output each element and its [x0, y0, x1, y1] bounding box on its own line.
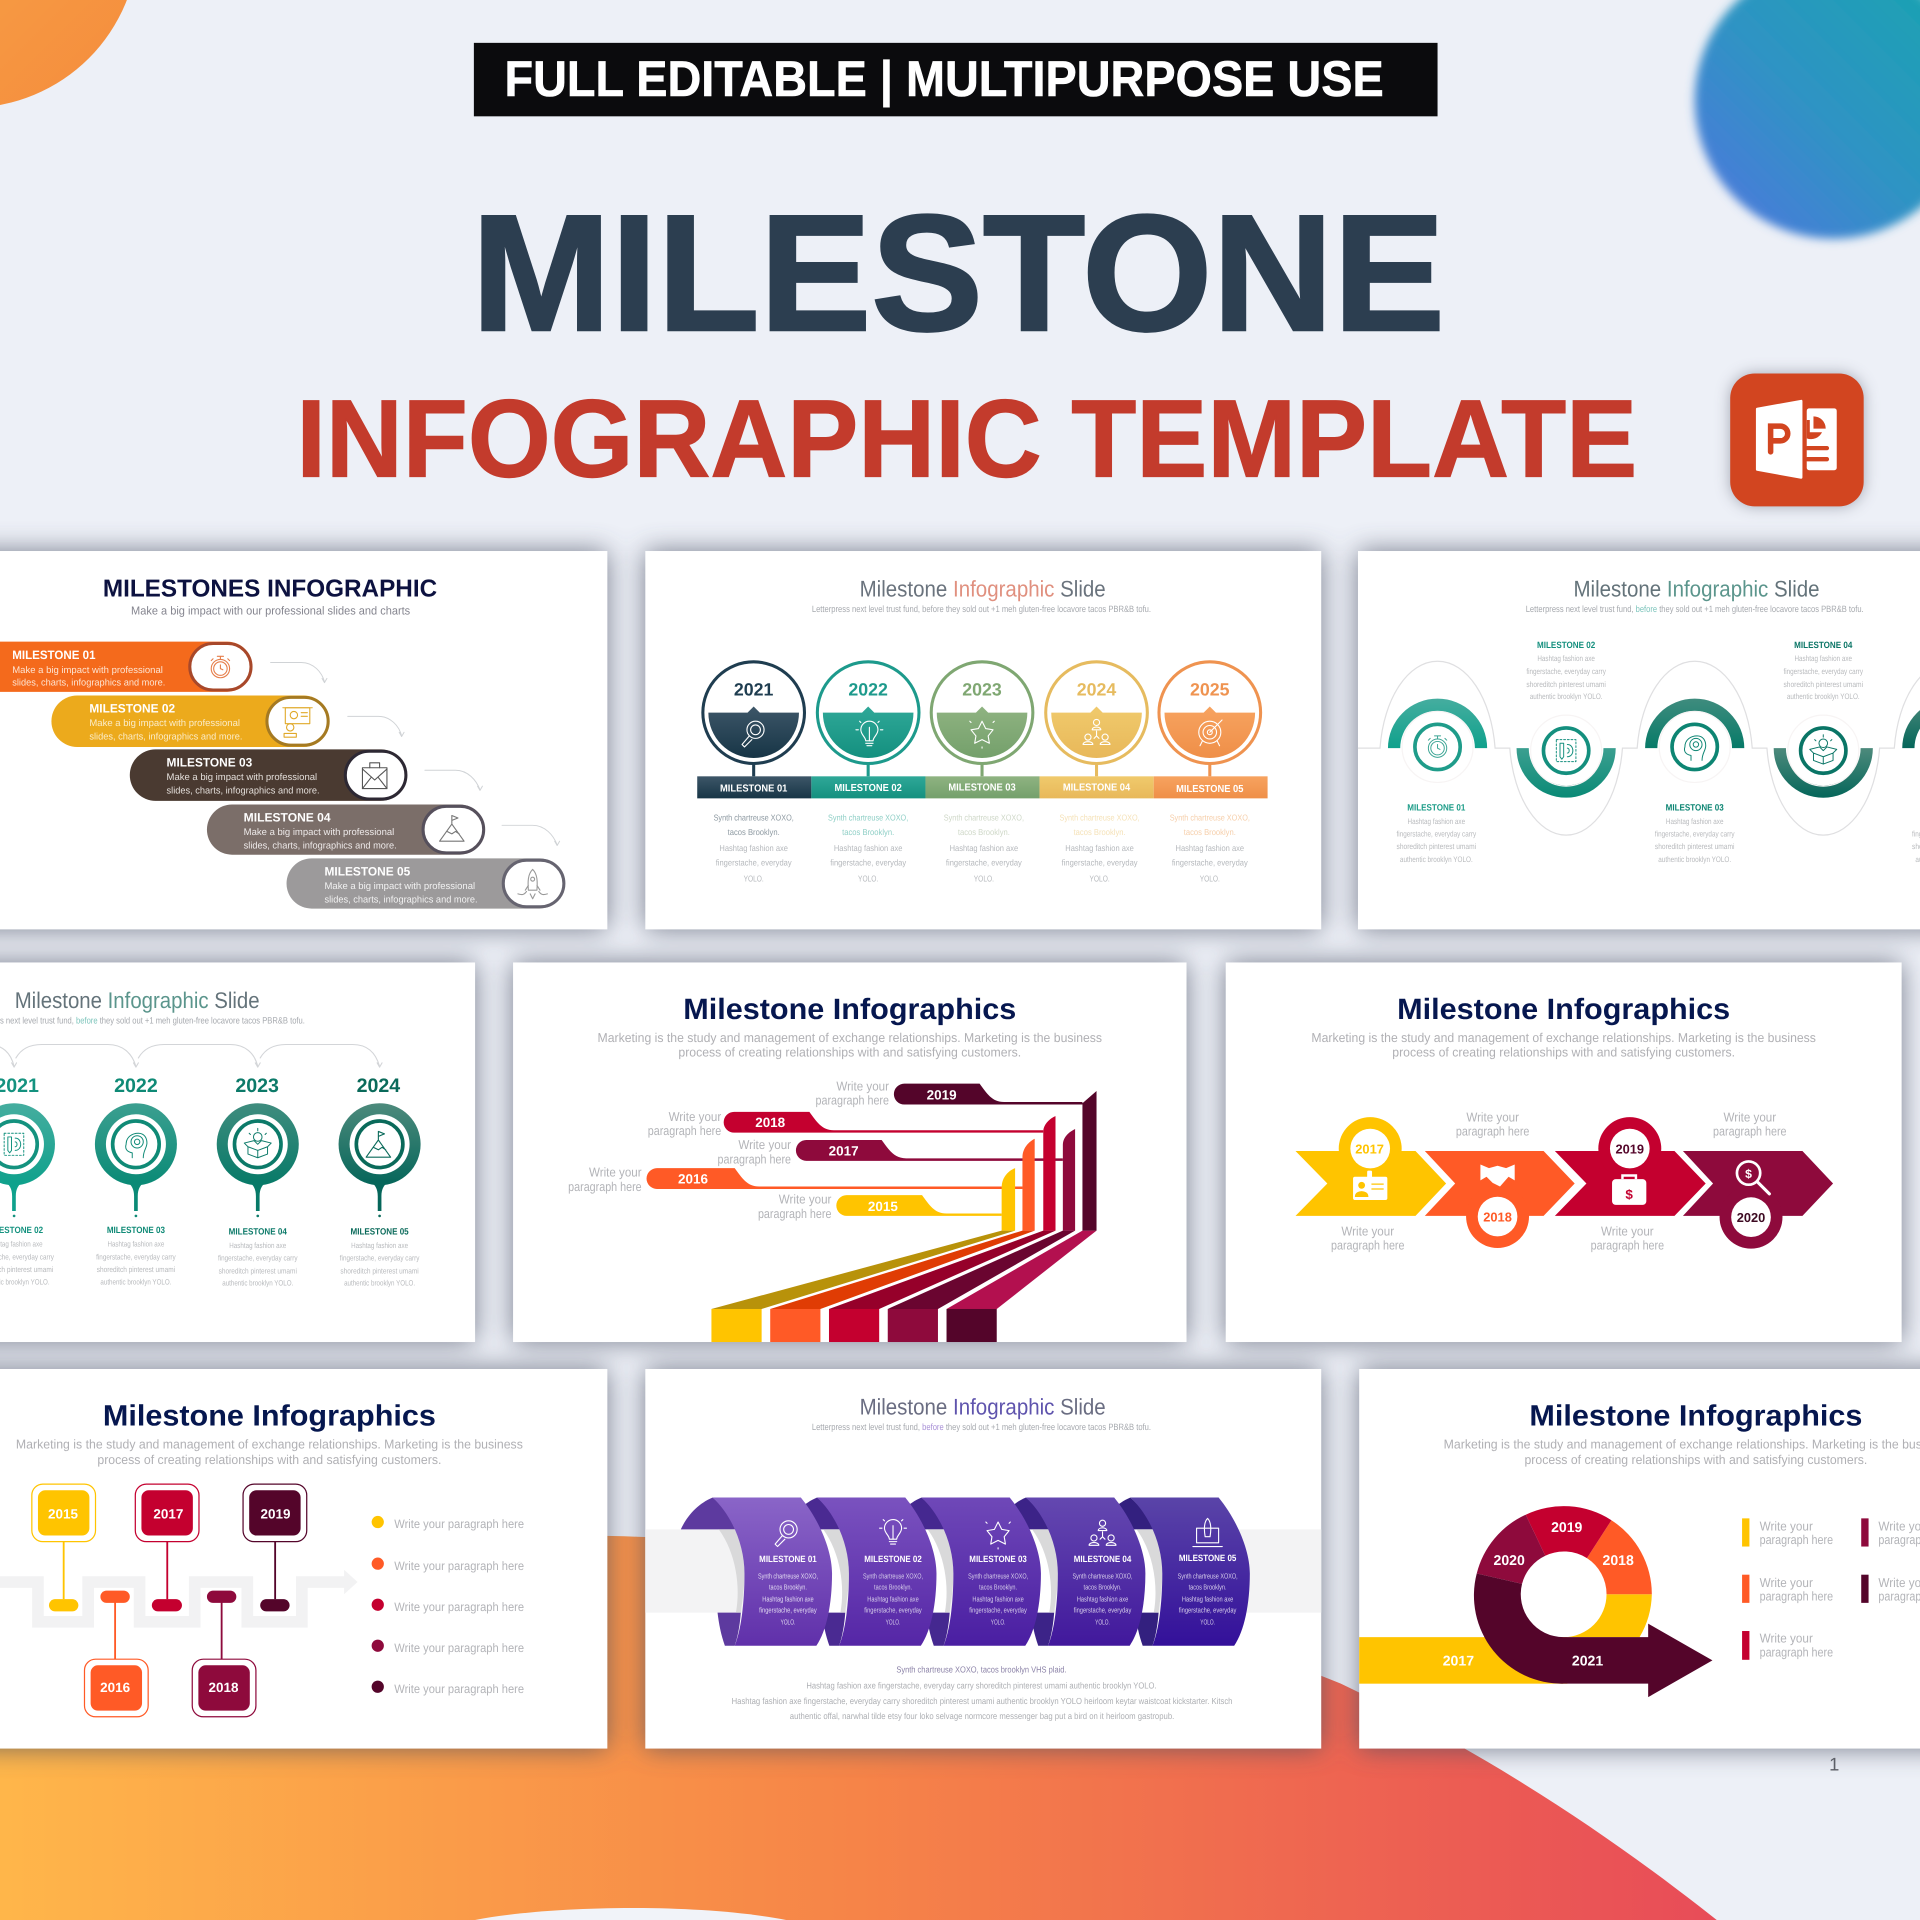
column text 3 [944, 813, 1024, 884]
label 02 [1526, 639, 1607, 702]
label 04: authentic brooklyn YOLO. [1787, 693, 1860, 702]
label 03: shoreditch pinterest umami [1655, 843, 1734, 852]
blue corner blob [1695, 0, 1920, 239]
box 2017: 2017 [153, 1507, 183, 1522]
pin label 03 [96, 1224, 177, 1287]
label 04: fingerstache, everyday carry [1783, 668, 1864, 677]
panel: slide A stepped milestones [0, 551, 607, 929]
label 01: authentic brooklyn YOLO. [1400, 856, 1473, 864]
chevron captions: Write your [1723, 1111, 1777, 1125]
title: Milestone Infographic Slide [860, 1393, 1106, 1419]
column text 4 [1059, 813, 1140, 884]
2024 circle: 2024 [1077, 681, 1116, 700]
column text 4: Hashtag fashion axe [1065, 844, 1134, 853]
subtitle: Marketing is the study and management of exchange relationships. Marketing is the business [1311, 1031, 1816, 1046]
tab 2017: 2017 [829, 1144, 859, 1159]
label 01: MILESTONE 01 [1407, 802, 1465, 813]
box 2016: 2016 [100, 1681, 130, 1696]
milestone 01 pill: Make a big impact with professional [12, 664, 163, 675]
pin label 04 [218, 1226, 298, 1288]
tab captions: Write your [669, 1110, 722, 1125]
label 04: MILESTONE 04 [1794, 639, 1853, 650]
bottom light curve [475, 1908, 786, 1920]
ribbon 01: Hashtag fashion axe [762, 1596, 814, 1604]
pin label 03: MILESTONE 03 [107, 1224, 165, 1236]
milestone 04 pill: slides, charts, infographics and more. [244, 840, 397, 851]
ribbon 05: tacos Brooklyn. [1189, 1583, 1227, 1592]
milestone 01 pill [0, 642, 252, 692]
title: Milestone Infographics [103, 1400, 436, 1433]
label 01: fingerstache, everyday carry [1397, 830, 1477, 839]
top banner: FULL EDITABLE | MULTIPURPOSE USE [504, 51, 1384, 108]
tab 2016: 2016 [678, 1172, 708, 1187]
title: Milestone Infographics [1397, 993, 1730, 1026]
ribbon 03: tacos Brooklyn. [979, 1583, 1017, 1592]
subtitle [1444, 1438, 1920, 1468]
label 04: Hashtag fashion axe [1794, 655, 1852, 664]
label 04: shoreditch pinterest umami [1783, 681, 1863, 689]
tab captions: paragraph here [718, 1152, 791, 1167]
milestone bar: MILESTONE 03 [948, 781, 1016, 793]
title: Milestone Infographics [1529, 1400, 1862, 1433]
ribbon 05: Hashtag fashion axe [1182, 1596, 1234, 1604]
chevron captions: paragraph here [1331, 1239, 1405, 1253]
main title: MILESTONE [471, 181, 1445, 366]
column text 2: fingerstache, everyday [830, 858, 907, 868]
box 2019: 2019 [261, 1507, 291, 1522]
icon: PowerPoint [1730, 373, 1864, 506]
ribbon 04 [994, 1498, 1145, 1646]
chevron 2017: 2017 [1355, 1142, 1384, 1157]
legend: paragraph here [1760, 1646, 1833, 1660]
column text 1: fingerstache, everyday [716, 858, 792, 868]
milestone 03 pill: slides, charts, infographics and more. [167, 785, 320, 796]
milestone 03 node [1645, 699, 1744, 782]
tab captions: paragraph here [758, 1207, 832, 1221]
tab 2019 [894, 1084, 1097, 1231]
donut arrow chart: 2021 [1572, 1654, 1604, 1669]
milestone 05 pill: Make a big impact with professional [324, 880, 475, 891]
chevron 2019: $ [1625, 1188, 1633, 1202]
chevron captions: paragraph here [1456, 1125, 1530, 1139]
column text 2 [828, 813, 908, 884]
title: Milestone Infographics [683, 993, 1016, 1026]
column text 1: Hashtag fashion axe [719, 844, 788, 853]
ribbon 03 [890, 1498, 1041, 1646]
box 2018: 2018 [208, 1681, 238, 1696]
legend: Write your [1760, 1520, 1813, 1534]
pin 2022 [95, 1076, 177, 1217]
chevron captions [1331, 1111, 1787, 1253]
panel: slide C wave milestones [1358, 551, 1920, 929]
legend: Write your paragraph here [394, 1518, 525, 1532]
footer text: Hashtag fashion axe fingerstache, everyday carry shoreditch pinterest umami authentic brooklyn YOLO. [806, 1680, 1157, 1691]
milestone 04 pill: MILESTONE 04 [244, 812, 331, 825]
label 03: authentic brooklyn YOLO. [1658, 856, 1731, 864]
donut arrow chart: 2019 [1551, 1521, 1582, 1536]
2024 circle [1046, 662, 1147, 776]
label 01: shoreditch pinterest umami [1397, 843, 1476, 852]
ribbon 04: YOLO. [1095, 1618, 1110, 1627]
column text 2: YOLO. [858, 876, 878, 884]
chevron captions: Write your [1466, 1111, 1520, 1125]
title: Milestone Infographic Slide [860, 576, 1106, 601]
label 05 partial [1912, 830, 1920, 864]
subtitle: process of creating relationships with and satisfying customers. [678, 1046, 1021, 1060]
tab captions: Write your [779, 1193, 832, 1207]
pin label 03: Hashtag fashion axe [107, 1240, 165, 1249]
tab captions: Write your [836, 1079, 890, 1094]
chevron 2019 [1555, 1117, 1706, 1216]
milestone 01 pill: MILESTONE 01 [12, 649, 96, 662]
column text 4: Synth chartreuse XOXO, [1059, 813, 1140, 823]
label 01 [1397, 802, 1477, 864]
column text 3: tacos Brooklyn. [958, 828, 1010, 838]
chevron 2018 [1425, 1151, 1575, 1248]
pin 2021 [0, 1076, 55, 1217]
panel: slide B year circles [645, 551, 1321, 929]
subtitle: Make a big impact with our professional slides and charts [131, 605, 410, 618]
milestone bar [697, 776, 1268, 798]
milestone 02 pill [51, 696, 329, 747]
ribbon 01: Synth chartreuse XOXO, [758, 1572, 818, 1581]
footer text [732, 1664, 1232, 1722]
chevron 2017 [1296, 1117, 1446, 1216]
column text 4: fingerstache, everyday [1062, 858, 1138, 868]
chevron 2019: 2019 [1615, 1142, 1644, 1157]
tab captions: paragraph here [816, 1093, 889, 1108]
tab captions: Write your [589, 1166, 642, 1180]
donut arrow chart: 2017 [1443, 1654, 1474, 1669]
pin label 03: authentic brooklyn YOLO. [100, 1278, 172, 1287]
column text 2: Hashtag fashion axe [834, 844, 903, 853]
pin label 03: shoreditch pinterest umami [97, 1266, 175, 1275]
column text 5 [1170, 813, 1250, 884]
road bands [711, 1231, 1097, 1342]
panel: slide D pin timeline [0, 962, 475, 1342]
orange corner blob [0, 0, 138, 108]
tab captions [568, 1079, 890, 1221]
column text 5: Synth chartreuse XOXO, [1170, 813, 1250, 823]
subtitle: process of creating relationships with and satisfying customers. [1524, 1453, 1867, 1468]
box 2015 [32, 1484, 96, 1611]
pin label 04: Hashtag fashion axe [229, 1242, 287, 1250]
label 02: MILESTONE 02 [1537, 639, 1595, 650]
legend: Write your paragraph here [394, 1683, 525, 1697]
milestone 05 pill [287, 858, 564, 909]
column text 2: tacos Brooklyn. [842, 828, 894, 838]
ribbon 04: Synth chartreuse XOXO, [1073, 1572, 1133, 1581]
tab 2015 [836, 1168, 1015, 1231]
ribbon 01: MILESTONE 01 [759, 1553, 817, 1564]
milestone 03 pill [130, 749, 407, 801]
label 02: fingerstache, everyday carry [1526, 668, 1607, 677]
2023 circle: 2023 [962, 681, 1002, 700]
2023 circle [931, 662, 1033, 776]
tab captions: Write your [738, 1138, 792, 1153]
column text 1 [714, 813, 794, 884]
milestone 02 pill: slides, charts, infographics and more. [89, 731, 242, 742]
donut arrow chart [1359, 1506, 1712, 1697]
chevron 2020: 2020 [1737, 1211, 1766, 1226]
subtitle: Letterpress next level trust fund, before they sold out +1 meh gluten-free locavore tacos PBR&B tofu. [812, 1422, 1151, 1433]
column text 1: YOLO. [744, 876, 764, 884]
legend: Write your [1760, 1632, 1813, 1646]
ribbon 01 [681, 1498, 832, 1646]
pin 2024: 2024 [357, 1076, 400, 1097]
pin label 05: MILESTONE 05 [351, 1226, 409, 1237]
ribbon 04: MILESTONE 04 [1074, 1553, 1132, 1564]
label 03: MILESTONE 03 [1666, 802, 1724, 813]
pin 2024 [339, 1076, 421, 1217]
legend: paragraph here [1760, 1589, 1833, 1604]
pin label 05: authentic brooklyn YOLO. [344, 1280, 415, 1288]
milestone 04 pill: Make a big impact with professional [244, 827, 395, 838]
2025 circle [1159, 662, 1261, 776]
tab 2016 [647, 1139, 1035, 1231]
pin 2023: 2023 [235, 1076, 279, 1097]
milestone 03 pill: MILESTONE 03 [167, 757, 253, 770]
tab 2018 [724, 1112, 1056, 1231]
ribbon 02: fingerstache, everyday [864, 1607, 922, 1615]
panel: slide I donut arrow [1359, 1369, 1920, 1749]
footer text: Synth chartreuse XOXO, tacos brooklyn VHS plaid. [896, 1664, 1067, 1675]
2022 circle: 2022 [848, 681, 888, 700]
ribbon 02 [785, 1498, 936, 1646]
ribbon 03: MILESTONE 03 [969, 1553, 1027, 1564]
title: MILESTONES INFOGRAPHIC [103, 576, 437, 602]
chevron captions: paragraph here [1591, 1239, 1664, 1253]
box 2015: 2015 [48, 1507, 78, 1522]
page number: 1 [1829, 1755, 1839, 1776]
ribbon 02: MILESTONE 02 [864, 1553, 922, 1564]
donut arrow chart: 2020 [1494, 1554, 1525, 1569]
column text 3: Synth chartreuse XOXO, [944, 813, 1024, 823]
box 2016 [84, 1591, 148, 1717]
tab 2015: 2015 [868, 1200, 898, 1215]
chevron captions: Write your [1601, 1224, 1654, 1239]
label 02: shoreditch pinterest umami [1526, 681, 1606, 689]
arrows [271, 662, 560, 846]
pin label 02 [0, 1224, 55, 1287]
milestone 02 pill: MILESTONE 02 [89, 703, 176, 716]
title: Milestone Infographic Slide [15, 987, 260, 1013]
grey band [645, 1529, 1321, 1613]
column text 5: fingerstache, everyday [1172, 858, 1248, 868]
subtitle [1311, 1031, 1816, 1060]
milestone bar: MILESTONE 04 [1063, 781, 1131, 793]
connector arrows [0, 1044, 382, 1067]
legend: Write your paragraph here [394, 1601, 525, 1614]
box 2017 [135, 1484, 199, 1611]
ribbon 04: tacos Brooklyn. [1084, 1583, 1122, 1592]
2021 circle: 2021 [734, 681, 773, 700]
subtitle: Letterpress next level trust fund, before they sold out +1 meh gluten-free locavore tacos PBR&B tofu. [1526, 604, 1864, 615]
pin 2023 [217, 1076, 299, 1217]
2021 circle [703, 662, 804, 776]
milestone bar: MILESTONE 02 [834, 781, 902, 793]
column text 2: Synth chartreuse XOXO, [828, 813, 908, 823]
ribbon 05: Synth chartreuse XOXO, [1178, 1572, 1238, 1581]
column text 3: Hashtag fashion axe [950, 844, 1018, 853]
pin label 05: fingerstache, everyday carry [340, 1254, 420, 1263]
ribbon 02: Synth chartreuse XOXO, [863, 1572, 923, 1581]
label 02: authentic brooklyn YOLO. [1530, 693, 1603, 702]
milestone 01 node [1388, 699, 1487, 782]
panel: slide G zigzag timeline [0, 1369, 607, 1749]
ribbon 04: Hashtag fashion axe [1077, 1596, 1129, 1604]
ribbon 03: Synth chartreuse XOXO, [968, 1572, 1028, 1581]
label 03: Hashtag fashion axe [1666, 818, 1724, 827]
legend [1742, 1518, 1920, 1660]
label 01: Hashtag fashion axe [1408, 818, 1465, 827]
column text 4: YOLO. [1089, 876, 1110, 884]
milestone 05 pill: slides, charts, infographics and more. [324, 894, 478, 905]
ribbon 01: fingerstache, everyday [759, 1607, 817, 1615]
ribbon 05: MILESTONE 05 [1179, 1553, 1236, 1564]
column text 5: tacos Brooklyn. [1184, 828, 1236, 838]
subtitle: process of creating relationships with and satisfying customers. [97, 1453, 441, 1468]
legend [372, 1516, 525, 1697]
label 03 [1655, 802, 1735, 864]
milestone 05 pill: MILESTONE 05 [324, 866, 411, 879]
column text 3: YOLO. [974, 876, 994, 884]
subtitle [16, 1438, 523, 1468]
ribbon 01: YOLO. [781, 1618, 796, 1627]
pin 2022: 2022 [114, 1076, 158, 1097]
partial node 05 [1902, 699, 1920, 748]
tab captions: paragraph here [648, 1124, 721, 1139]
slide shadows [0, 551, 1920, 1749]
tab captions: paragraph here [568, 1180, 642, 1194]
milestone bar: MILESTONE 01 [720, 782, 788, 794]
panel: slide F chevrons [1226, 962, 1902, 1342]
title: Milestone Infographic Slide [1573, 576, 1820, 601]
milestone 01 pill: slides, charts, infographics and more. [12, 677, 165, 688]
ribbon 02: YOLO. [886, 1618, 901, 1627]
pin label 04: authentic brooklyn YOLO. [222, 1280, 294, 1288]
pin label 04: fingerstache, everyday carry [218, 1254, 298, 1263]
legend: Write your paragraph here [394, 1642, 525, 1656]
chevron 2020 [1683, 1151, 1833, 1249]
milestone 02 node [1517, 715, 1616, 798]
ribbon 05 [1099, 1498, 1250, 1646]
bottom gradient wave [0, 1536, 1717, 1920]
pin label 04: shoreditch pinterest umami [219, 1267, 297, 1276]
column text 5: YOLO. [1200, 876, 1220, 884]
ribbon 02: tacos Brooklyn. [874, 1583, 912, 1592]
tab 2019: 2019 [927, 1089, 957, 1103]
pin label 05: shoreditch pinterest umami [340, 1267, 419, 1276]
chevron captions: Write your [1341, 1224, 1395, 1239]
box 2018 [192, 1591, 256, 1717]
ribbon 03: Hashtag fashion axe [972, 1596, 1024, 1604]
pin label 03: fingerstache, everyday carry [96, 1253, 177, 1262]
legend: Write your [1760, 1576, 1813, 1591]
label 03: fingerstache, everyday carry [1655, 830, 1735, 839]
chevron 2018: 2018 [1483, 1210, 1512, 1225]
subtitle: Marketing is the study and management of exchange relationships. Marketing is the business [598, 1031, 1102, 1046]
subtitle: Letterpress next level trust fund, before they sold out +1 meh gluten-free locavore tacos PBR&B tofu. [812, 604, 1151, 615]
chevron 2020: $ [1745, 1168, 1753, 1182]
pin label 04: MILESTONE 04 [229, 1226, 288, 1237]
milestone 04 node [1774, 715, 1873, 798]
ribbon 04: fingerstache, everyday [1074, 1607, 1131, 1615]
column text 5: Hashtag fashion axe [1176, 844, 1244, 853]
subtitle: INFOGRAPHIC TEMPLATE [296, 378, 1637, 501]
ribbon 03: fingerstache, everyday [969, 1607, 1027, 1615]
chevron captions: paragraph here [1713, 1125, 1787, 1139]
footer text: authentic offal, narwhal tilde etsy four loko selvage normcore messenger bag put a bird on it heirloom gastropub. [790, 1711, 1174, 1722]
ribbon 05: fingerstache, everyday [1179, 1607, 1236, 1615]
milestone 02 pill: Make a big impact with professional [89, 718, 240, 729]
legend: paragraph here [1760, 1533, 1833, 1548]
tab 2018: 2018 [755, 1116, 785, 1131]
2022 circle [817, 662, 919, 776]
panel: slide E perspective road [513, 962, 1187, 1342]
milestone 03 pill: Make a big impact with professional [167, 771, 317, 782]
tab 2017 [796, 1129, 1075, 1231]
legend: Write your paragraph here [394, 1560, 525, 1573]
panel: slide H purple ribbon [645, 1369, 1321, 1749]
column text 3: fingerstache, everyday [946, 858, 1022, 868]
2025 circle: 2025 [1190, 681, 1230, 700]
ribbon 05: YOLO. [1200, 1618, 1215, 1627]
pin label 05 [340, 1226, 420, 1288]
wave line [1358, 661, 1920, 835]
ribbon 03: YOLO. [991, 1618, 1006, 1627]
milestone 04 pill [207, 804, 485, 855]
subtitle: process of creating relationships with and satisfying customers. [1392, 1046, 1735, 1060]
footer text: Hashtag fashion axe fingerstache, everyday carry shoreditch pinterest umami authentic brooklyn YOLO heirloom keytar waistcoat kickstarter. Kitsch [732, 1695, 1232, 1706]
milestone bar: MILESTONE 05 [1176, 782, 1244, 795]
subtitle [598, 1031, 1102, 1060]
column text 1: Synth chartreuse XOXO, [714, 813, 794, 823]
subtitle: Marketing is the study and management of exchange relationships. Marketing is the business [16, 1438, 523, 1452]
donut arrow chart: 2018 [1602, 1554, 1635, 1569]
box 2019 [243, 1484, 307, 1611]
label 02: Hashtag fashion axe [1537, 655, 1595, 664]
ribbon 02: Hashtag fashion axe [867, 1596, 919, 1604]
label 04 [1783, 639, 1864, 702]
pin label 05: Hashtag fashion axe [351, 1242, 409, 1250]
column text 4: tacos Brooklyn. [1074, 828, 1126, 838]
zigzag path [0, 1570, 358, 1622]
column text 1: tacos Brooklyn. [728, 828, 780, 838]
ribbon 01: tacos Brooklyn. [769, 1583, 807, 1592]
